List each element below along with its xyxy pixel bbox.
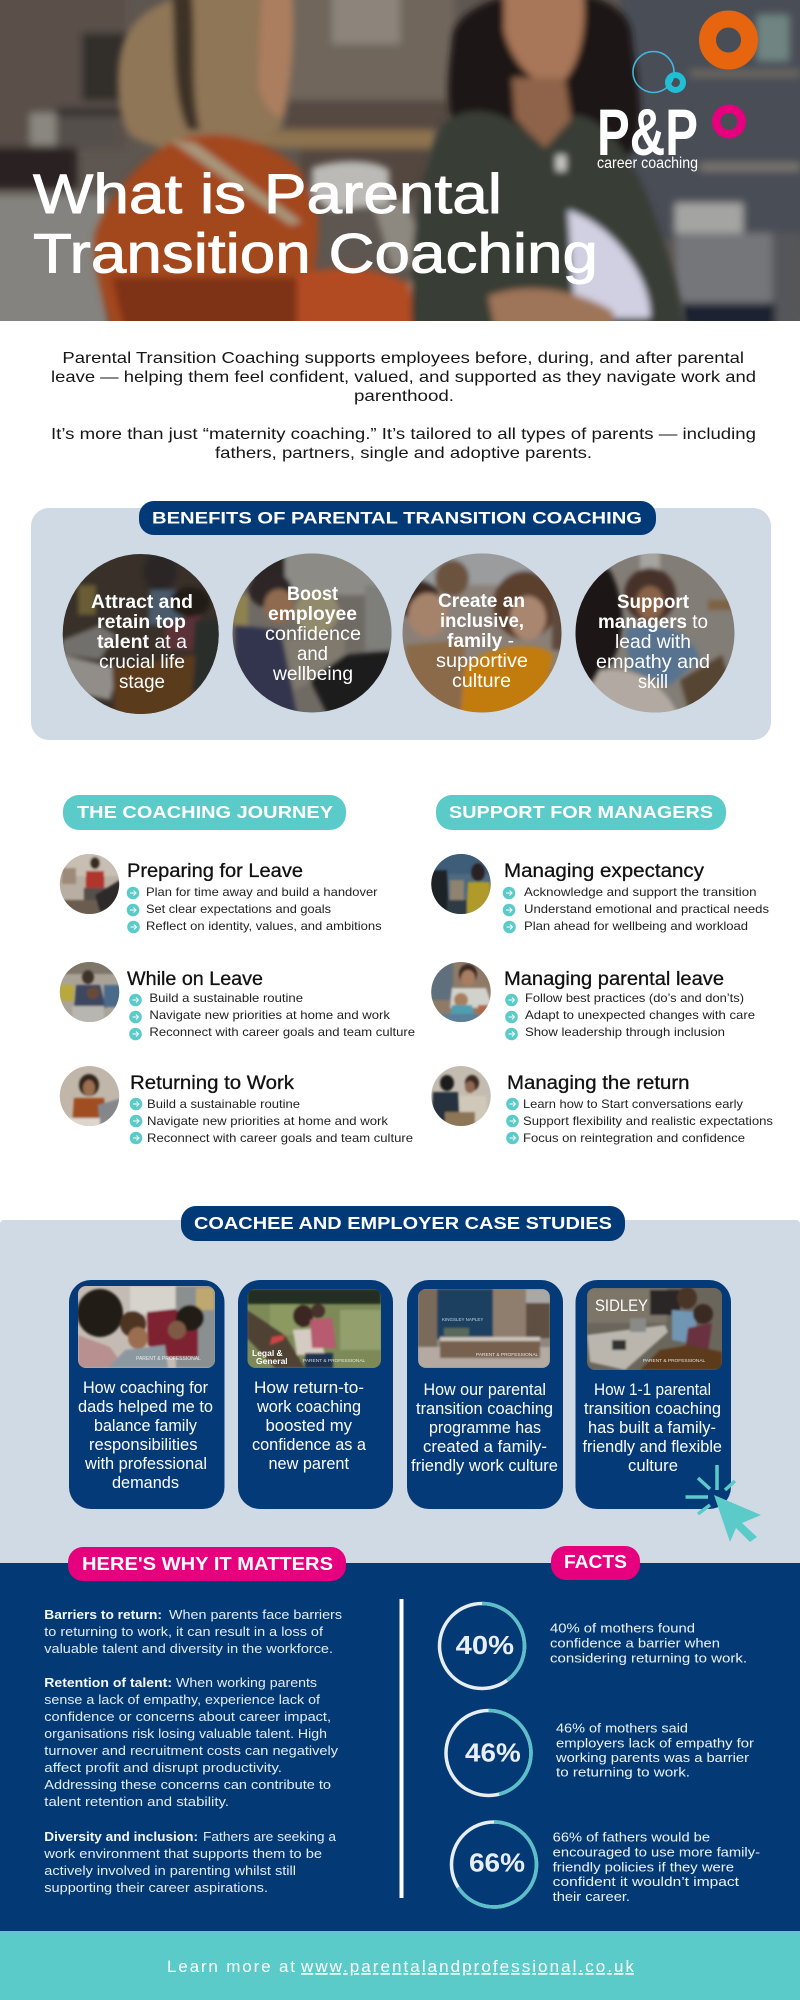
title (33, 163, 598, 285)
benefit circle 1: talent at a (97, 631, 187, 653)
heading: here's why it matters: HERE'S WHY IT MATTERS (82, 1554, 333, 1574)
heading: case studies (181, 1206, 625, 1241)
heading: support for managers: SUPPORT FOR MANAGERS (449, 802, 713, 822)
case study card 2: PARENT & PROFESSIONAL (303, 1358, 366, 1364)
paragraph: retention of talent: talent retention and stability. (44, 1794, 229, 1809)
case study card 3: How our parental (424, 1381, 546, 1399)
fact text: to returning to work. (556, 1765, 690, 1780)
intro text (51, 350, 756, 462)
paragraph: retention of talent: organisations risk losing valuable talent. High (44, 1726, 327, 1741)
heading: facts (551, 1546, 640, 1580)
benefit circle 4: lead with (615, 631, 691, 653)
step bullets: Understand emotional and practical needs (524, 902, 769, 916)
paragraph: diversity and inclusion: actively involved in parenting whilst still (44, 1863, 296, 1878)
intro text: It’s more than just “maternity coaching.” It’s tailored to all types of parents — including (51, 426, 756, 443)
benefit circle 2: confidence (265, 623, 361, 645)
fact text: encouraged to use more family- (553, 1845, 760, 1860)
logo tagline: career coaching (597, 155, 698, 172)
fact text: confident it wouldn’t impact (553, 1874, 739, 1889)
donut chart 66%: 66% (469, 1848, 525, 1878)
title: What is Parental (33, 163, 502, 225)
avatar photo (431, 962, 491, 1022)
step bullets: Learn how to Start conversations early (523, 1097, 743, 1111)
fact text (553, 1830, 760, 1904)
fact text (550, 1621, 747, 1666)
paragraph: retention of talent: Retention of talent: (44, 1675, 172, 1690)
benefit circle 2 (230, 550, 395, 720)
intro text: Parental Transition Coaching supports employees before, during, and after parental (62, 350, 744, 367)
step bullets: Support flexibility and realistic expectations (523, 1114, 773, 1128)
benefit circle 4: skill (638, 671, 668, 693)
case study card 3: created a family- (423, 1438, 547, 1456)
hero photo banner (0, 0, 800, 330)
heading: here's why it matters (68, 1547, 346, 1581)
case study card 3: transition coaching (416, 1400, 553, 1418)
benefit circle 3: culture (452, 670, 511, 692)
case study card 2: boosted my (266, 1417, 353, 1435)
case study card 1: How coaching for (83, 1379, 208, 1397)
step bullets (505, 991, 755, 1040)
case study card 2: new parent (268, 1455, 349, 1473)
case study card 3: PARENT & PROFESSIONAL (476, 1352, 539, 1358)
paragraph: barriers to return (44, 1607, 343, 1656)
divider (400, 1599, 404, 1898)
step bullets (503, 885, 769, 933)
icon: small teal ring (668, 75, 683, 90)
case study card 2: General (256, 1356, 288, 1366)
fact text: 40% of mothers found (550, 1621, 695, 1636)
benefit circle 2: wellbeing (272, 663, 353, 685)
benefit circle 4: Support (617, 591, 689, 613)
case study card 1: with professional (84, 1455, 207, 1473)
case study card 2: work coaching (256, 1398, 361, 1416)
paragraph: barriers to return: valuable talent and diversity in the workforce. (44, 1641, 333, 1656)
case study card 1: PARENT & PROFESSIONAL (136, 1356, 201, 1362)
paragraph: diversity and inclusion (43, 1829, 337, 1895)
manager step: managing expectancy (429, 852, 769, 933)
intro text: parenthood. (354, 388, 454, 405)
icon: orange ring (708, 19, 750, 61)
text block: why it matters (43, 1607, 343, 1895)
fact: 40% (440, 1604, 747, 1688)
paragraph: barriers to return: When parents face barriers (169, 1607, 343, 1622)
journey step: preparing for leave (58, 852, 382, 933)
benefit circle 3: Create an (438, 590, 525, 612)
paragraph: retention of talent: affect profit and disrupt productivity. (44, 1760, 282, 1775)
paragraph: retention of talent (44, 1675, 339, 1809)
step bullets: Reconnect with career goals and team culture (147, 1131, 413, 1145)
heading: benefits: BENEFITS OF PARENTAL TRANSITION COACHING (152, 508, 642, 528)
manager step: managing parental leave (429, 960, 755, 1040)
donut chart 46% (446, 1710, 531, 1796)
fact text: 46% of mothers said (556, 1721, 688, 1736)
case study card 2: How return-to- (254, 1379, 364, 1397)
case study card 3 (407, 1280, 563, 1509)
step bullets: Set clear expectations and goals (146, 902, 331, 916)
benefit circle 3: inclusive, (440, 610, 524, 632)
step heading: While on Leave (127, 968, 263, 990)
benefit circle 3 (402, 554, 562, 712)
avatar photo (431, 854, 491, 914)
avatar photo (60, 962, 120, 1022)
panel: benefits (31, 501, 771, 740)
paragraph: barriers to return: Barriers to return: (44, 1607, 162, 1622)
step heading: Managing parental leave (504, 968, 724, 990)
case study card 4: transition coaching (584, 1400, 721, 1418)
benefit circle 1 (62, 554, 219, 714)
heading: the coaching journey: THE COACHING JOURNEY (77, 802, 333, 822)
fact text: confidence a barrier when (550, 1636, 720, 1651)
benefit circle 4: managers to (598, 611, 708, 633)
case study card 2 (238, 1280, 393, 1509)
step bullets: Build a sustainable routine (149, 991, 303, 1005)
step bullets (506, 1097, 773, 1145)
fact text: working parents was a barrier (555, 1750, 750, 1765)
case study card 4: culture (628, 1457, 678, 1475)
case study card 4: How 1-1 parental (594, 1381, 711, 1399)
step bullets: Reconnect with career goals and team culture (149, 1025, 415, 1039)
benefit circle 2: employee (268, 603, 357, 625)
avatar photo (60, 854, 120, 914)
step bullets: Plan for time away and build a handover (146, 885, 378, 899)
case study card 3: friendly work culture (411, 1457, 558, 1475)
step bullets: Reflect on identity, values, and ambitions (146, 919, 382, 933)
heading: support for managers (436, 795, 726, 830)
benefit circle 4 (576, 554, 734, 712)
case study card 1 (69, 1280, 224, 1509)
case study card 4: has built a family- (588, 1419, 716, 1437)
case study card 3: programme has (429, 1419, 541, 1437)
step heading: Managing expectancy (504, 860, 704, 882)
paragraph: retention of talent: turnover and recruitment costs can negatively (44, 1743, 339, 1758)
case study card 2: confidence as a (252, 1436, 367, 1454)
benefit circle 3: supportive (436, 650, 528, 672)
fact: 66% (452, 1822, 760, 1907)
title: Transition Coaching (33, 223, 598, 285)
benefit circle 4: empathy and (596, 651, 710, 673)
step bullets (130, 1097, 413, 1145)
paragraph: retention of talent: Addressing these concerns can contribute to (44, 1777, 331, 1792)
fact: 46% (446, 1710, 755, 1796)
logo wordmark: P&P (597, 95, 698, 169)
benefit circle 1: crucial life (99, 651, 185, 673)
fact text: considering returning to work. (550, 1651, 747, 1666)
fact text: their career. (553, 1889, 630, 1904)
case study card 4: PARENT & PROFESSIONAL (643, 1358, 706, 1364)
donut chart 40% (440, 1604, 524, 1688)
step bullets (129, 991, 415, 1040)
case study card 1: responsibilities (89, 1436, 198, 1454)
footer banner: Learn more at (167, 1957, 295, 1976)
case study card 1: balance family (94, 1417, 198, 1435)
avatar photo (431, 1066, 491, 1126)
paragraph: retention of talent: When working parents (176, 1675, 318, 1690)
donut chart 66% (452, 1822, 536, 1907)
icon: click cursor (686, 1465, 761, 1542)
paragraph: retention of talent: sense a lack of empathy, experience lack of (44, 1692, 320, 1707)
intro text: leave — helping them feel confident, valued, and supported as they navigate work and (51, 369, 756, 386)
case study card 4: friendly and flexible (582, 1438, 722, 1456)
fact text: 66% of fathers would be (553, 1830, 710, 1845)
donut chart 40%: 40% (456, 1630, 514, 1660)
logo: P&P career coaching (597, 19, 750, 172)
manager step: managing the return (429, 1064, 773, 1145)
paragraph: retention of talent: confidence or concerns about career impact, (44, 1709, 331, 1724)
paragraph: diversity and inclusion: Diversity and inclusion: (44, 1829, 198, 1844)
heading: case studies: COACHEE AND EMPLOYER CASE STUDIES (194, 1213, 612, 1233)
step bullets: Acknowledge and support the transition (524, 885, 756, 899)
case study card 4 (576, 1280, 731, 1509)
step heading: Managing the return (507, 1072, 690, 1094)
benefit circle 1: retain top (97, 611, 186, 633)
step heading: Returning to Work (130, 1072, 294, 1094)
step bullets: Navigate new priorities at home and work (149, 1008, 391, 1022)
case study card 1: dads helped me to (78, 1398, 213, 1416)
paragraph: diversity and inclusion: Fathers are seeking a (203, 1829, 337, 1844)
donut chart 46%: 46% (465, 1738, 521, 1768)
case study card 2: Legal & (252, 1348, 283, 1358)
step bullets (127, 885, 382, 933)
step bullets: Build a sustainable routine (147, 1097, 300, 1111)
journey step: while on leave (58, 960, 415, 1040)
step bullets: Follow best practices (do’s and don’ts) (525, 991, 744, 1005)
icon: thin blue ring (633, 52, 674, 92)
step bullets: Plan ahead for wellbeing and workload (524, 919, 748, 933)
fact text: employers lack of empathy for (556, 1736, 755, 1751)
benefit circle 1: stage (119, 671, 165, 693)
heading: benefits (139, 501, 656, 535)
panel: navy why it matters and facts (0, 1563, 800, 1931)
panel: case studies (0, 1206, 800, 1570)
fact text: friendly policies if they were (553, 1860, 734, 1875)
case study card 3: KINGSLEY NAPLEY (442, 1317, 483, 1322)
paragraph: diversity and inclusion: work environment that supports them to be (43, 1846, 322, 1861)
benefit circle 2: Boost (287, 583, 338, 605)
step bullets: Show leadership through inclusion (525, 1025, 725, 1039)
paragraph: barriers to return: to returning to work, it can result in a loss of (44, 1624, 323, 1639)
journey step: returning to work (58, 1064, 413, 1145)
benefit circle 1: Attract and (91, 591, 193, 613)
case study card 1: demands (112, 1474, 179, 1492)
heading: the coaching journey (63, 795, 346, 830)
benefit circle 3: family - (447, 630, 514, 652)
footer banner (0, 1931, 800, 2000)
intro text: fathers, partners, single and adoptive parents. (215, 445, 592, 462)
paragraph: diversity and inclusion: supporting their career aspirations. (44, 1880, 268, 1895)
step heading: Preparing for Leave (127, 860, 303, 882)
benefit circle 2: and (297, 643, 328, 665)
step bullets: Navigate new priorities at home and work (147, 1114, 389, 1128)
heading: facts: FACTS (564, 1552, 627, 1572)
icon: pink ring (716, 109, 742, 134)
step bullets: Adapt to unexpected changes with care (525, 1008, 755, 1022)
footer banner: www.parentalandprofessional.co.uk (300, 1957, 634, 1976)
step bullets: Focus on reintegration and confidence (523, 1131, 745, 1145)
fact text (555, 1721, 755, 1780)
case study card 4: SIDLEY (595, 1296, 648, 1315)
avatar photo (60, 1066, 120, 1126)
